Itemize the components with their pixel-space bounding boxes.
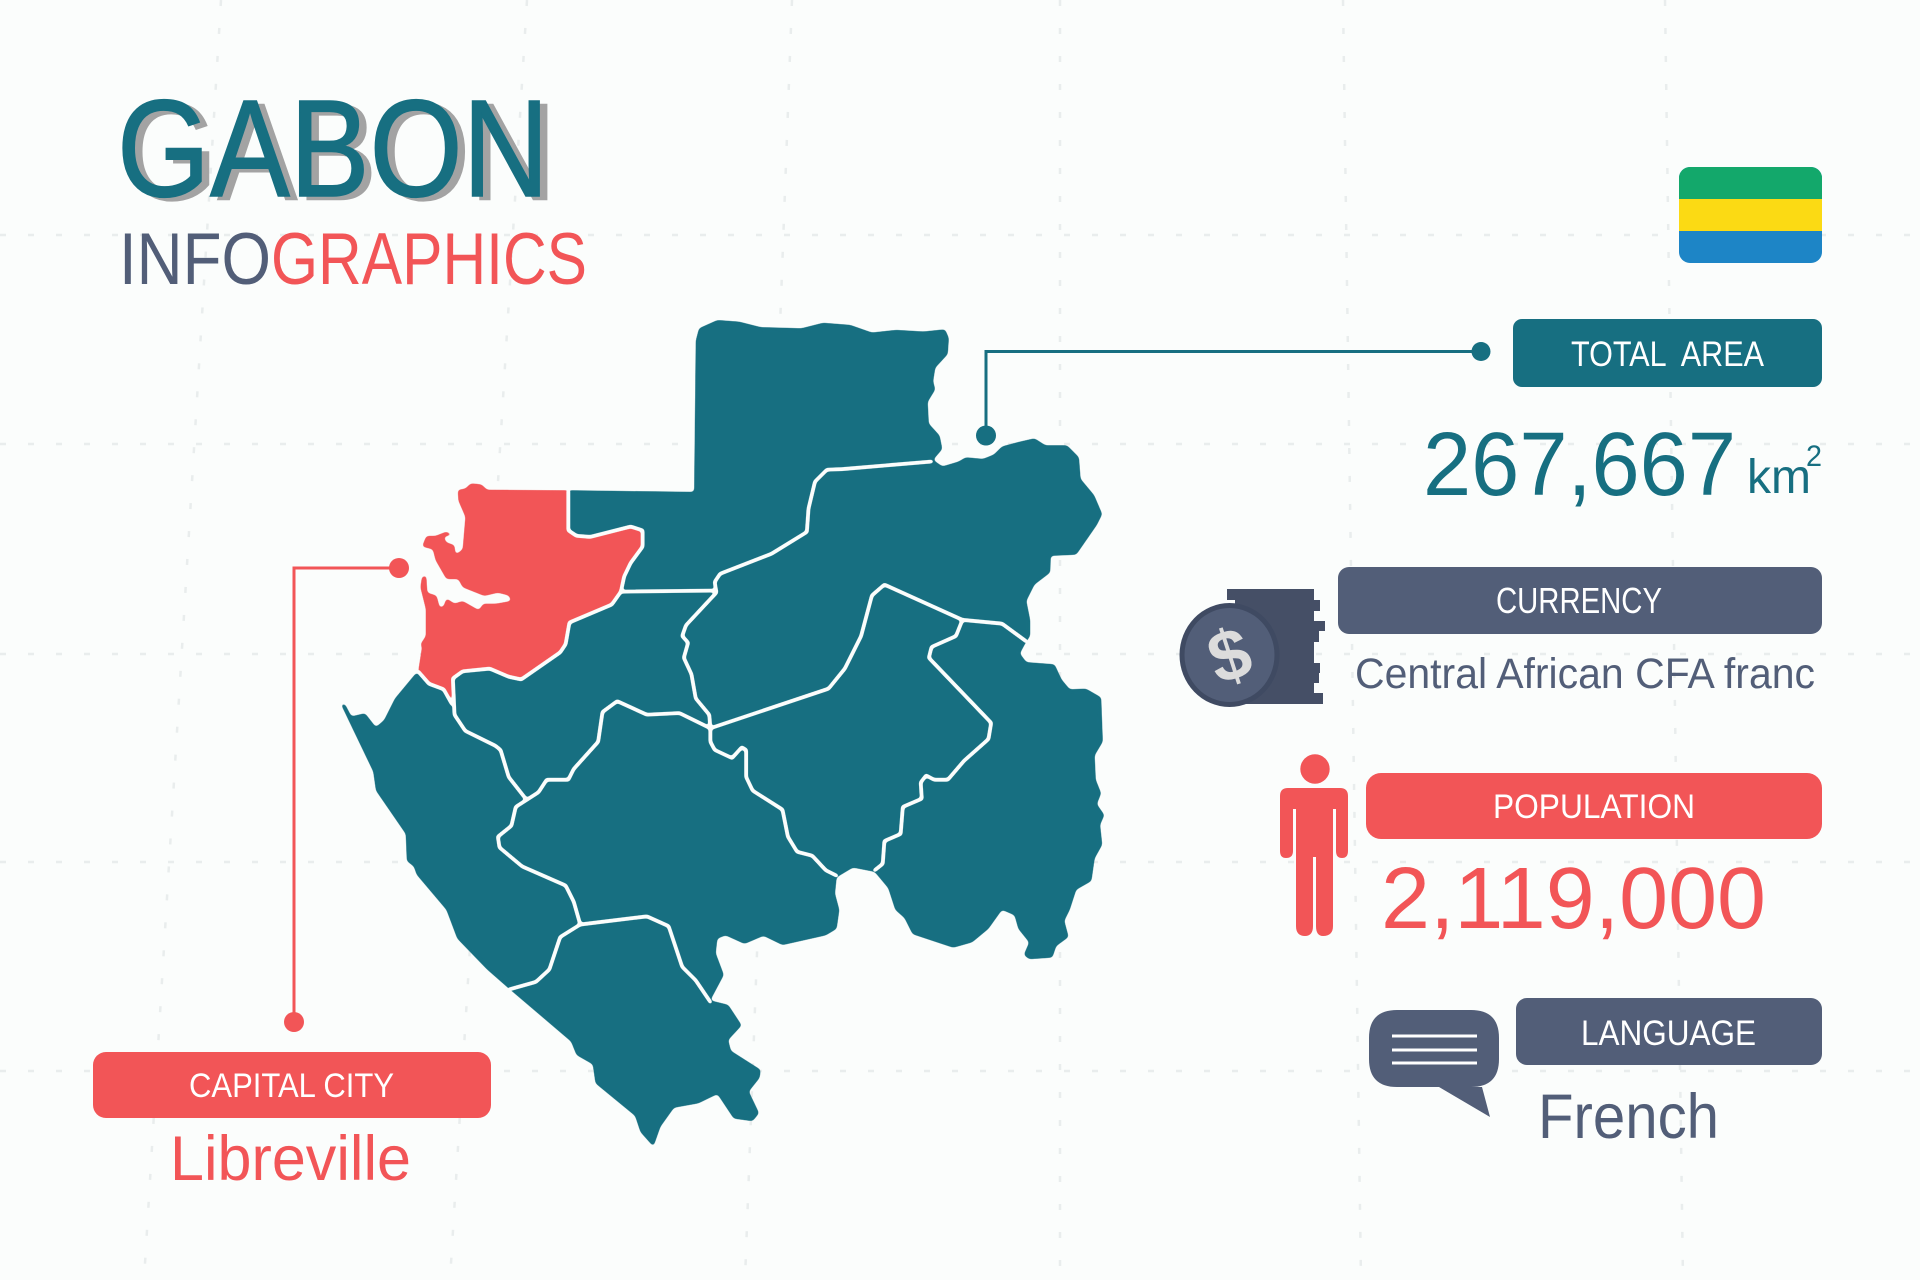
connector: capital city: [284, 558, 409, 1032]
province borders: [418, 462, 1026, 1002]
panel: capital city: [93, 1052, 491, 1194]
icon: speech bubble: [1369, 1010, 1499, 1117]
panel: total area: [1423, 319, 1822, 515]
panel: language: [1369, 998, 1822, 1152]
value: currency: Central African CFA franc: [1355, 650, 1815, 698]
value: capital city: Libreville: [170, 1124, 411, 1194]
unit: km squared: km: [1747, 451, 1811, 504]
subtitle: INFOGRAPHICS: GRAPHICS: [271, 219, 587, 300]
subtitle: INFOGRAPHICS: [119, 219, 587, 300]
icon: Gabon flag: [1679, 167, 1822, 263]
label: population: POPULATION: [1493, 788, 1695, 826]
panel: currency: [1180, 567, 1822, 707]
label: population: [1366, 773, 1822, 839]
map of Gabon: [341, 320, 1104, 1147]
connector: total area: [976, 342, 1490, 446]
label: capital city: [93, 1052, 491, 1118]
map region: capital province (highlighted): [418, 483, 643, 704]
label: total area: TOTAL AREA: [1571, 335, 1765, 374]
subtitle: INFOGRAPHICS: INFO: [119, 219, 271, 300]
icon: coin stack: [1180, 589, 1325, 707]
title: GABON: GABON: [124, 76, 556, 230]
value: language: French: [1538, 1082, 1719, 1152]
icon: coin stack: $: [1198, 612, 1261, 700]
label: currency: [1338, 567, 1822, 634]
label: language: LANGUAGE: [1581, 1014, 1756, 1053]
icon: person: [1280, 754, 1348, 936]
label: total area: [1513, 319, 1822, 387]
label: language: [1516, 998, 1822, 1065]
panel: population: [1280, 754, 1822, 947]
map regions: teal provinces: [341, 320, 1104, 1147]
value: area: 267,667: [1423, 415, 1736, 515]
unit: km squared: 2: [1806, 440, 1822, 473]
label: currency: CURRENCY: [1496, 580, 1662, 621]
title: GABON: GABON: [117, 72, 549, 226]
value: population: 2,119,000: [1381, 850, 1766, 947]
label: capital city: CAPITAL CITY: [189, 1067, 394, 1105]
